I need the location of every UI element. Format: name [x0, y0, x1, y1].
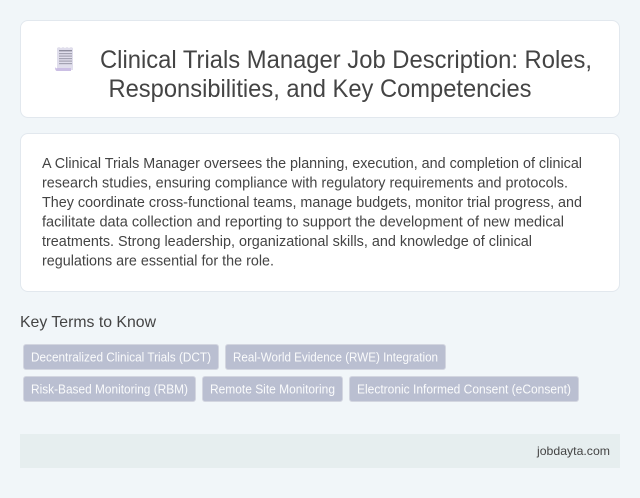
chip: Risk-Based Monitoring (RBM): Risk-Based Monitoring (RBM) [31, 382, 188, 396]
title [100, 46, 592, 103]
title: Responsibilities, and Key Competencies [108, 75, 532, 103]
description text: research studies, ensuring compliance with regulatory requirements and protocols. [42, 176, 568, 192]
chip: Electronic Informed Consent (eConsent) [349, 376, 579, 402]
description text: facilitate data collection and reporting to support the development of new medical [42, 214, 564, 230]
chip: Real-World Evidence (RWE) Integration [225, 344, 446, 370]
chip: Remote Site Monitoring [202, 376, 343, 402]
chip: Remote Site Monitoring: Remote Site Monitoring [210, 382, 335, 396]
chip: Decentralized Clinical Trials (DCT) [23, 344, 219, 370]
description panel [20, 133, 620, 292]
title: Clinical Trials Manager Job Description: Roles, [100, 46, 592, 74]
chip: Decentralized Clinical Trials (DCT): Decentralized Clinical Trials (DCT) [31, 350, 211, 364]
description text: A Clinical Trials Manager oversees the planning, execution, and completion of clinical [42, 156, 582, 172]
footer source text: jobdayta.com [536, 444, 610, 458]
key terms heading: Key Terms to Know [20, 314, 156, 331]
chip: Electronic Informed Consent (eConsent): Electronic Informed Consent (eConsent) [357, 382, 571, 396]
chip: Real-World Evidence (RWE) Integration: Real-World Evidence (RWE) Integration [233, 350, 438, 364]
description text [42, 156, 582, 270]
description text: regulations are essential for the role. [42, 254, 274, 270]
description text: They coordinate cross-functional teams, manage budgets, monitor trial progress, and [42, 195, 582, 211]
description text: treatments. Strong leadership, organizational skills, and knowledge of clinical [42, 234, 532, 250]
footer bar [20, 434, 620, 468]
chip: Risk-Based Monitoring (RBM) [23, 376, 196, 402]
header panel [20, 20, 620, 118]
icon: document scroll [55, 47, 73, 71]
